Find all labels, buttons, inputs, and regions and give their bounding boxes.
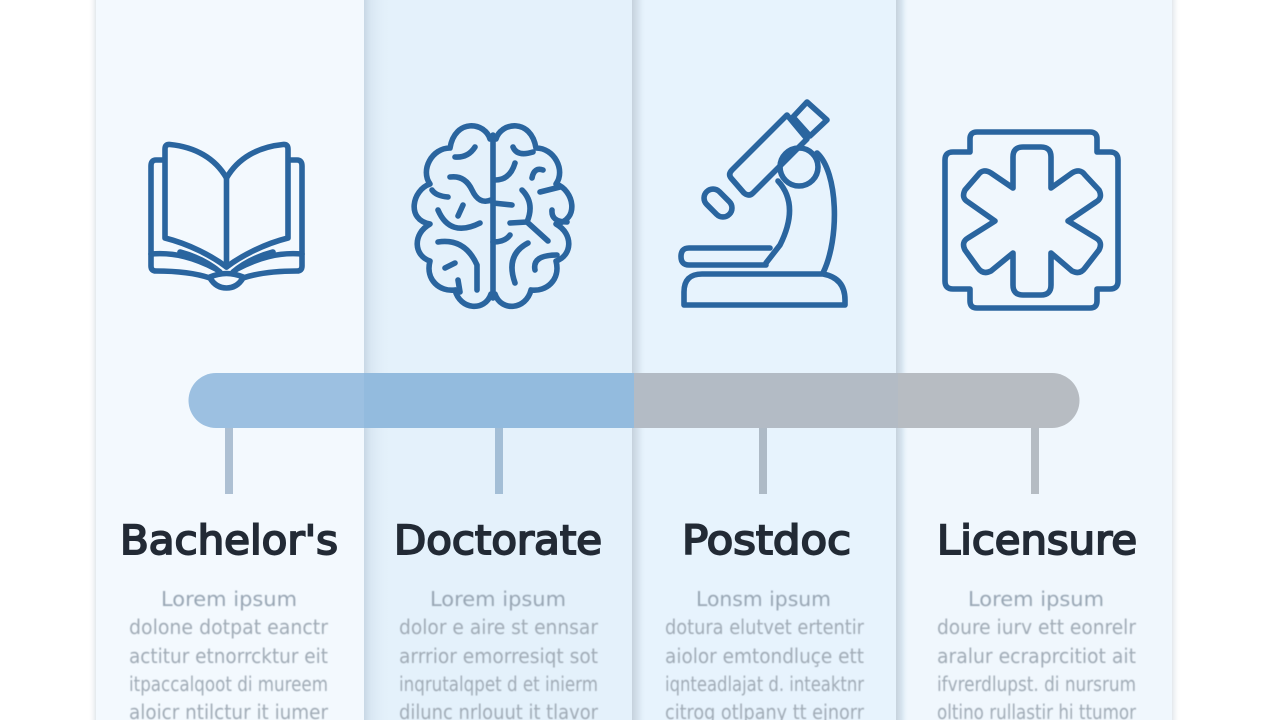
text block: Licensure description: doure iurv ett eonrelr bbox=[937, 615, 1137, 639]
text block: Doctorate description bbox=[399, 587, 599, 720]
text block: Bachelor's description: actitur etnorrcktur eit bbox=[129, 644, 328, 668]
text block: Licensure description: aralur ecraprcitiot ait bbox=[937, 644, 1136, 668]
panel: Doctorate column bbox=[364, 0, 634, 720]
text block: Doctorate description: dolor e aire st ennsar bbox=[399, 615, 599, 639]
heading: Licensure: Licensure bbox=[937, 518, 1137, 564]
text block: Licensure description bbox=[937, 587, 1137, 720]
text block: Bachelor's description: Lorem ipsum bbox=[161, 587, 297, 611]
panel: Licensure column bbox=[896, 0, 1181, 720]
text block: Licensure description: ifvrerdlupst. di nursrum bbox=[937, 672, 1136, 696]
panel: Postdoc column bbox=[632, 0, 898, 720]
icon: star of life badge bbox=[945, 132, 1118, 308]
text block: Postdoc description: iqnteadlajat d. inteaktnr bbox=[665, 672, 865, 696]
text block: Bachelor's description bbox=[129, 587, 329, 720]
text block: Doctorate description: arrrior emorresiqt sot bbox=[399, 644, 598, 668]
text block: Postdoc description: dotura elutvet ertentir bbox=[665, 615, 865, 639]
icon: open book bbox=[151, 144, 302, 288]
text block: Doctorate description: inqrutalqpet d et inierm bbox=[399, 672, 598, 696]
text block: Licensure description: Lorem ipsum bbox=[968, 587, 1104, 611]
heading: Postdoc: Postdoc bbox=[682, 518, 851, 564]
text block: Bachelor's description: dolone dotpat eanctr bbox=[129, 615, 329, 639]
timeline bar bbox=[188, 373, 1079, 428]
heading: Bachelor's: Bachelor's bbox=[120, 518, 338, 564]
panel: Bachelor's column bbox=[88, 0, 364, 720]
text block: Postdoc description bbox=[665, 587, 865, 720]
icon: microscope bbox=[681, 102, 845, 305]
text block: Doctorate description: Lorem ipsum bbox=[430, 587, 566, 611]
heading: Doctorate: Doctorate bbox=[394, 518, 602, 564]
text block: Postdoc description: aiolor emtondluçe ett bbox=[665, 644, 864, 668]
text block: Bachelor's description: itpaccalqoot di mureem bbox=[129, 672, 328, 696]
connector ticks bbox=[225, 428, 1039, 494]
text block: Postdoc description: Lonsm ipsum bbox=[696, 587, 831, 611]
icon: brain bbox=[414, 126, 572, 306]
